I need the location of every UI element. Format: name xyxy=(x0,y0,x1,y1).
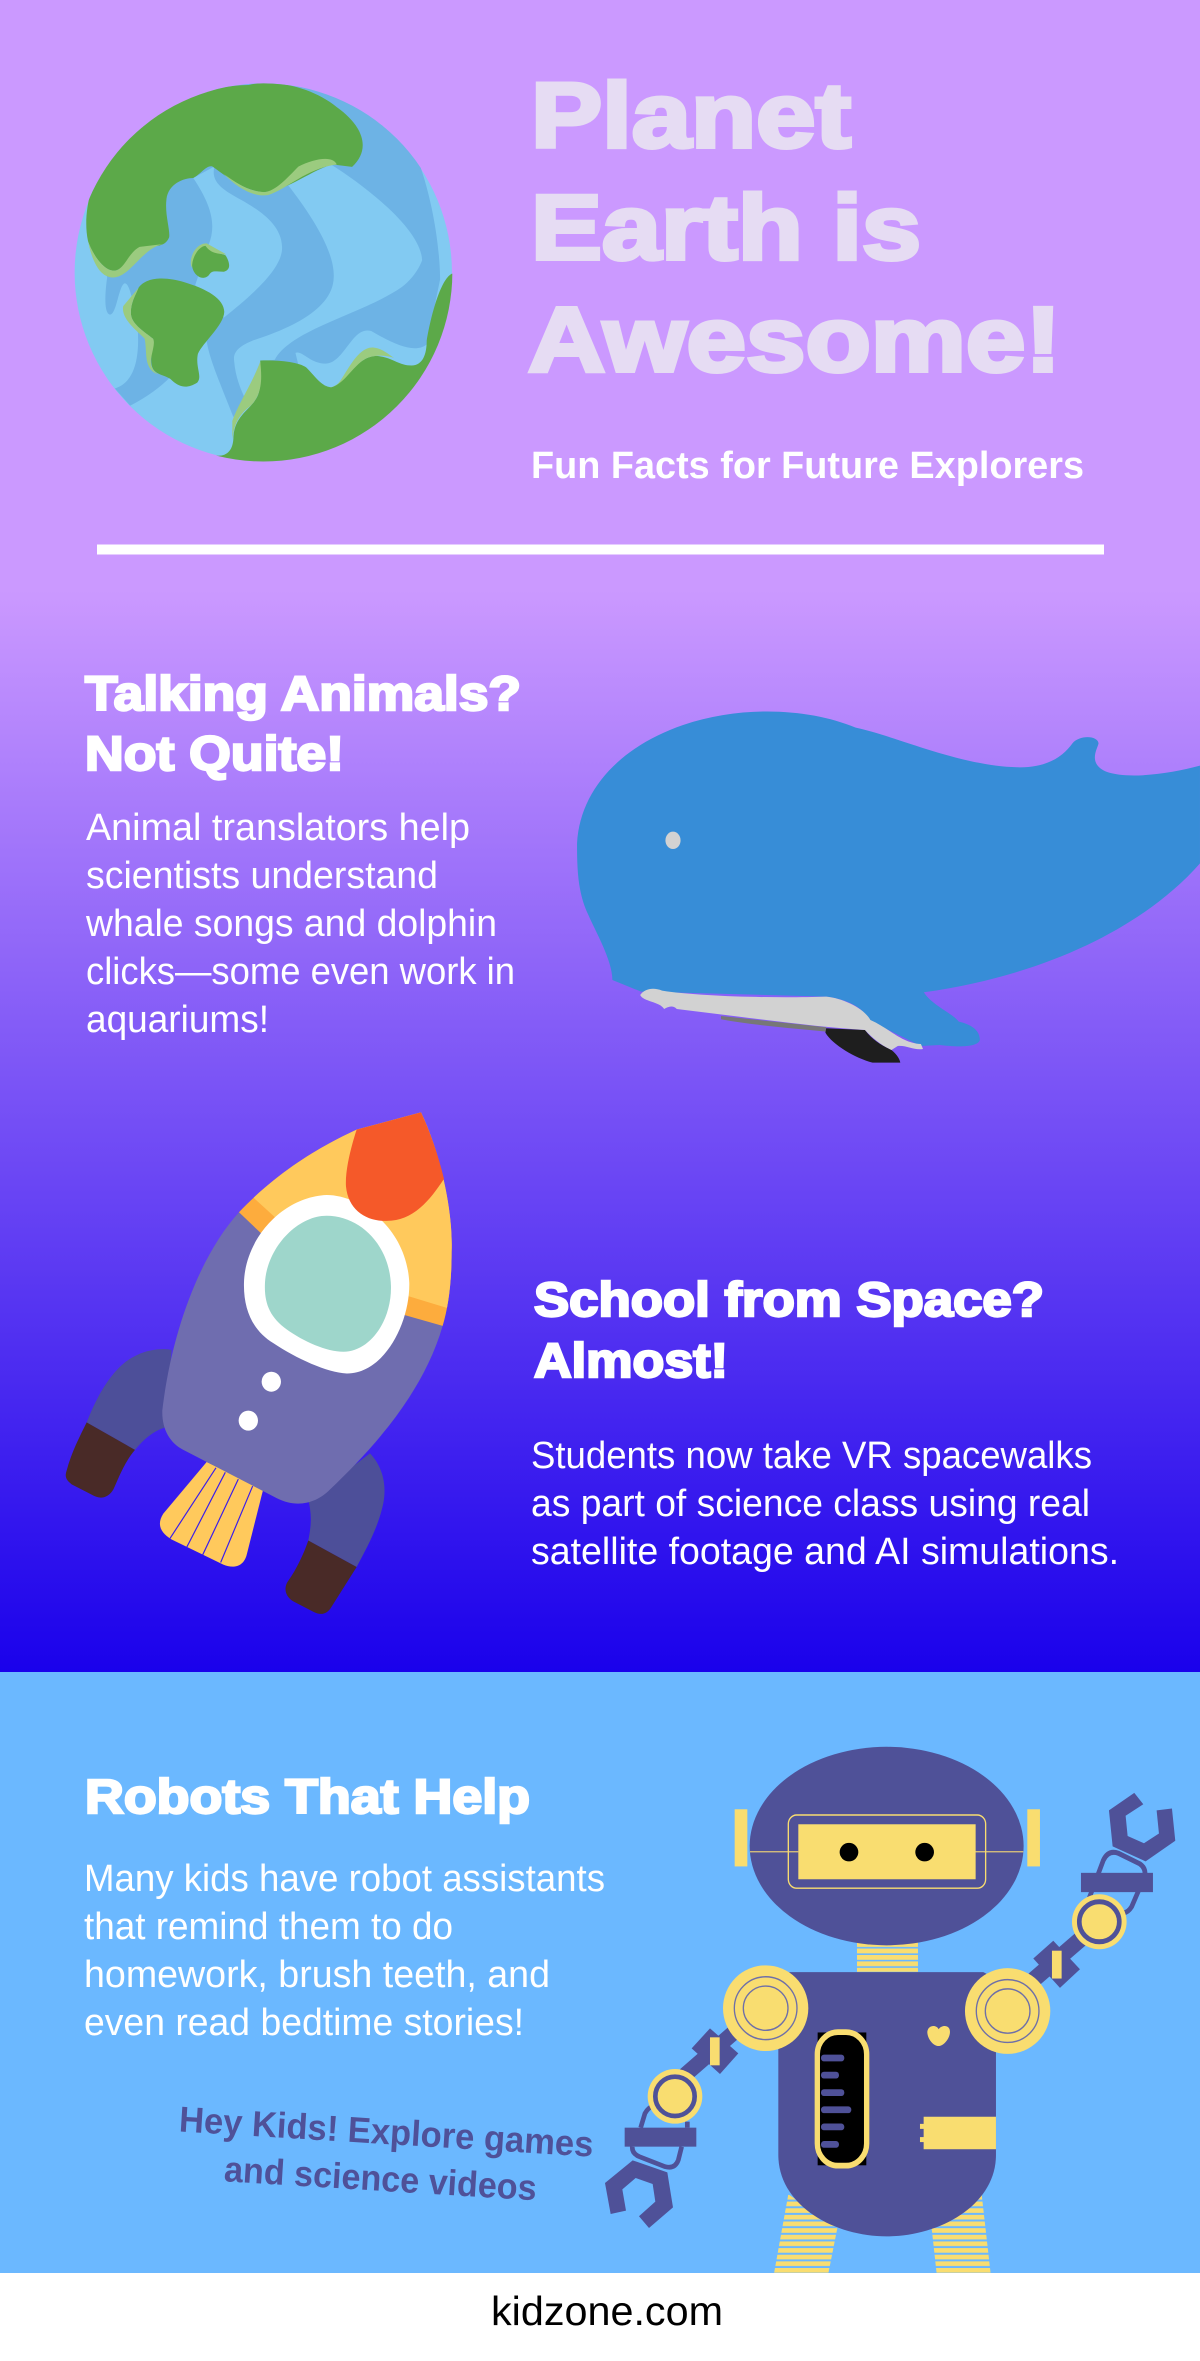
title: Earth is xyxy=(531,177,921,279)
section: talking animals body text: aquariums! xyxy=(86,999,269,1041)
section: talking animals body text: clicks—some even work in xyxy=(86,951,515,993)
section: talking animals body text: Animal translators help xyxy=(86,807,470,849)
robot body xyxy=(723,1747,1050,2274)
section: school from space body text: satellite footage and AI simulations. xyxy=(531,1531,1119,1573)
title: Planet xyxy=(531,65,851,167)
footer: website: kidzone.com xyxy=(491,2288,723,2334)
panel: robots section background xyxy=(0,1672,1200,2273)
section: school from space heading: School from Space? xyxy=(534,1274,1044,1327)
section: robots body text: homework, brush teeth, and xyxy=(84,1954,550,1996)
section: talking animals body text xyxy=(85,807,515,1041)
section: robots body text xyxy=(84,1858,605,2044)
illustration: whale xyxy=(577,711,1200,1063)
section: school from space body text: as part of science class using real xyxy=(531,1483,1090,1525)
callout: explore games: and science videos xyxy=(223,2148,538,2208)
illustration: rocket xyxy=(66,1090,473,1614)
section: robots body text: Many kids have robot assistants xyxy=(84,1858,605,1900)
callout: explore games xyxy=(175,2098,595,2212)
robot right arm and gripper xyxy=(1033,1793,1175,1988)
section: talking animals heading: Talking Animals? xyxy=(85,668,521,721)
section: school from space heading xyxy=(534,1274,1044,1388)
illustration: planet earth xyxy=(74,83,452,462)
section: robots heading: Robots That Help xyxy=(85,1771,530,1824)
section: talking animals body text: scientists understand xyxy=(86,855,438,897)
section: talking animals body text: whale songs and dolphin xyxy=(85,903,497,945)
illustration: robot xyxy=(605,1747,1175,2274)
footer: website xyxy=(0,2273,1200,2361)
subtitle: Fun Facts for Future Explorers xyxy=(531,445,1084,487)
section: school from space body text: Students now take VR spacewalks xyxy=(531,1435,1092,1477)
section: school from space body text xyxy=(531,1435,1119,1573)
section: robots body text: even read bedtime stories! xyxy=(84,2002,524,2044)
robot left arm and gripper xyxy=(605,2028,738,2228)
title: Awesome! xyxy=(528,289,1061,391)
background: top lilac to deep blue gradient xyxy=(0,0,1200,1672)
callout: explore games: Hey Kids! Explore games xyxy=(178,2098,595,2165)
section: school from space heading: Almost! xyxy=(534,1335,728,1388)
section: talking animals heading: Not Quite! xyxy=(85,728,344,781)
section: robots body text: that remind them to do xyxy=(84,1906,453,1948)
section: talking animals heading xyxy=(85,668,521,781)
title xyxy=(528,65,1061,391)
divider xyxy=(97,544,1104,554)
